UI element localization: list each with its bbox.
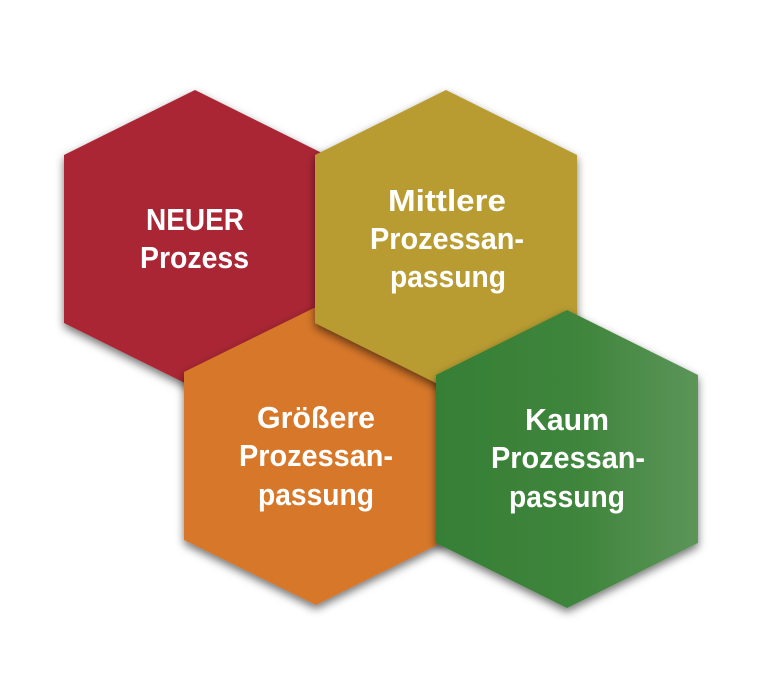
hexagon: Kaum Prozessanpassung: Prozessan- [491,440,645,475]
hexagon: Größere Prozessanpassung: passung [258,477,374,512]
hexagon: NEUER Prozess [64,90,326,388]
hexagon: Mittlere Prozessanpassung: Prozessan- [370,221,524,256]
hexagon: NEUER Prozess: Prozess [140,240,249,275]
hexagon: Mittlere Prozessanpassung: Mittlere [388,183,506,218]
hexagon: Größere Prozessanpassung: Prozessan- [239,438,393,473]
hexagon: Größere Prozessanpassung [184,307,447,605]
hexagon: Kaum Prozessanpassung: passung [509,479,625,514]
hexagon: Mittlere Prozessanpassung [315,90,577,388]
hexagon: NEUER Prozess: NEUER [146,202,244,237]
hexagon: Mittlere Prozessanpassung: passung [390,259,506,294]
hexagon: Größere Prozessanpassung: Größere [257,400,375,435]
hexagon: Kaum Prozessanpassung [436,310,698,608]
hexagon: Kaum Prozessanpassung: Kaum [525,402,609,437]
